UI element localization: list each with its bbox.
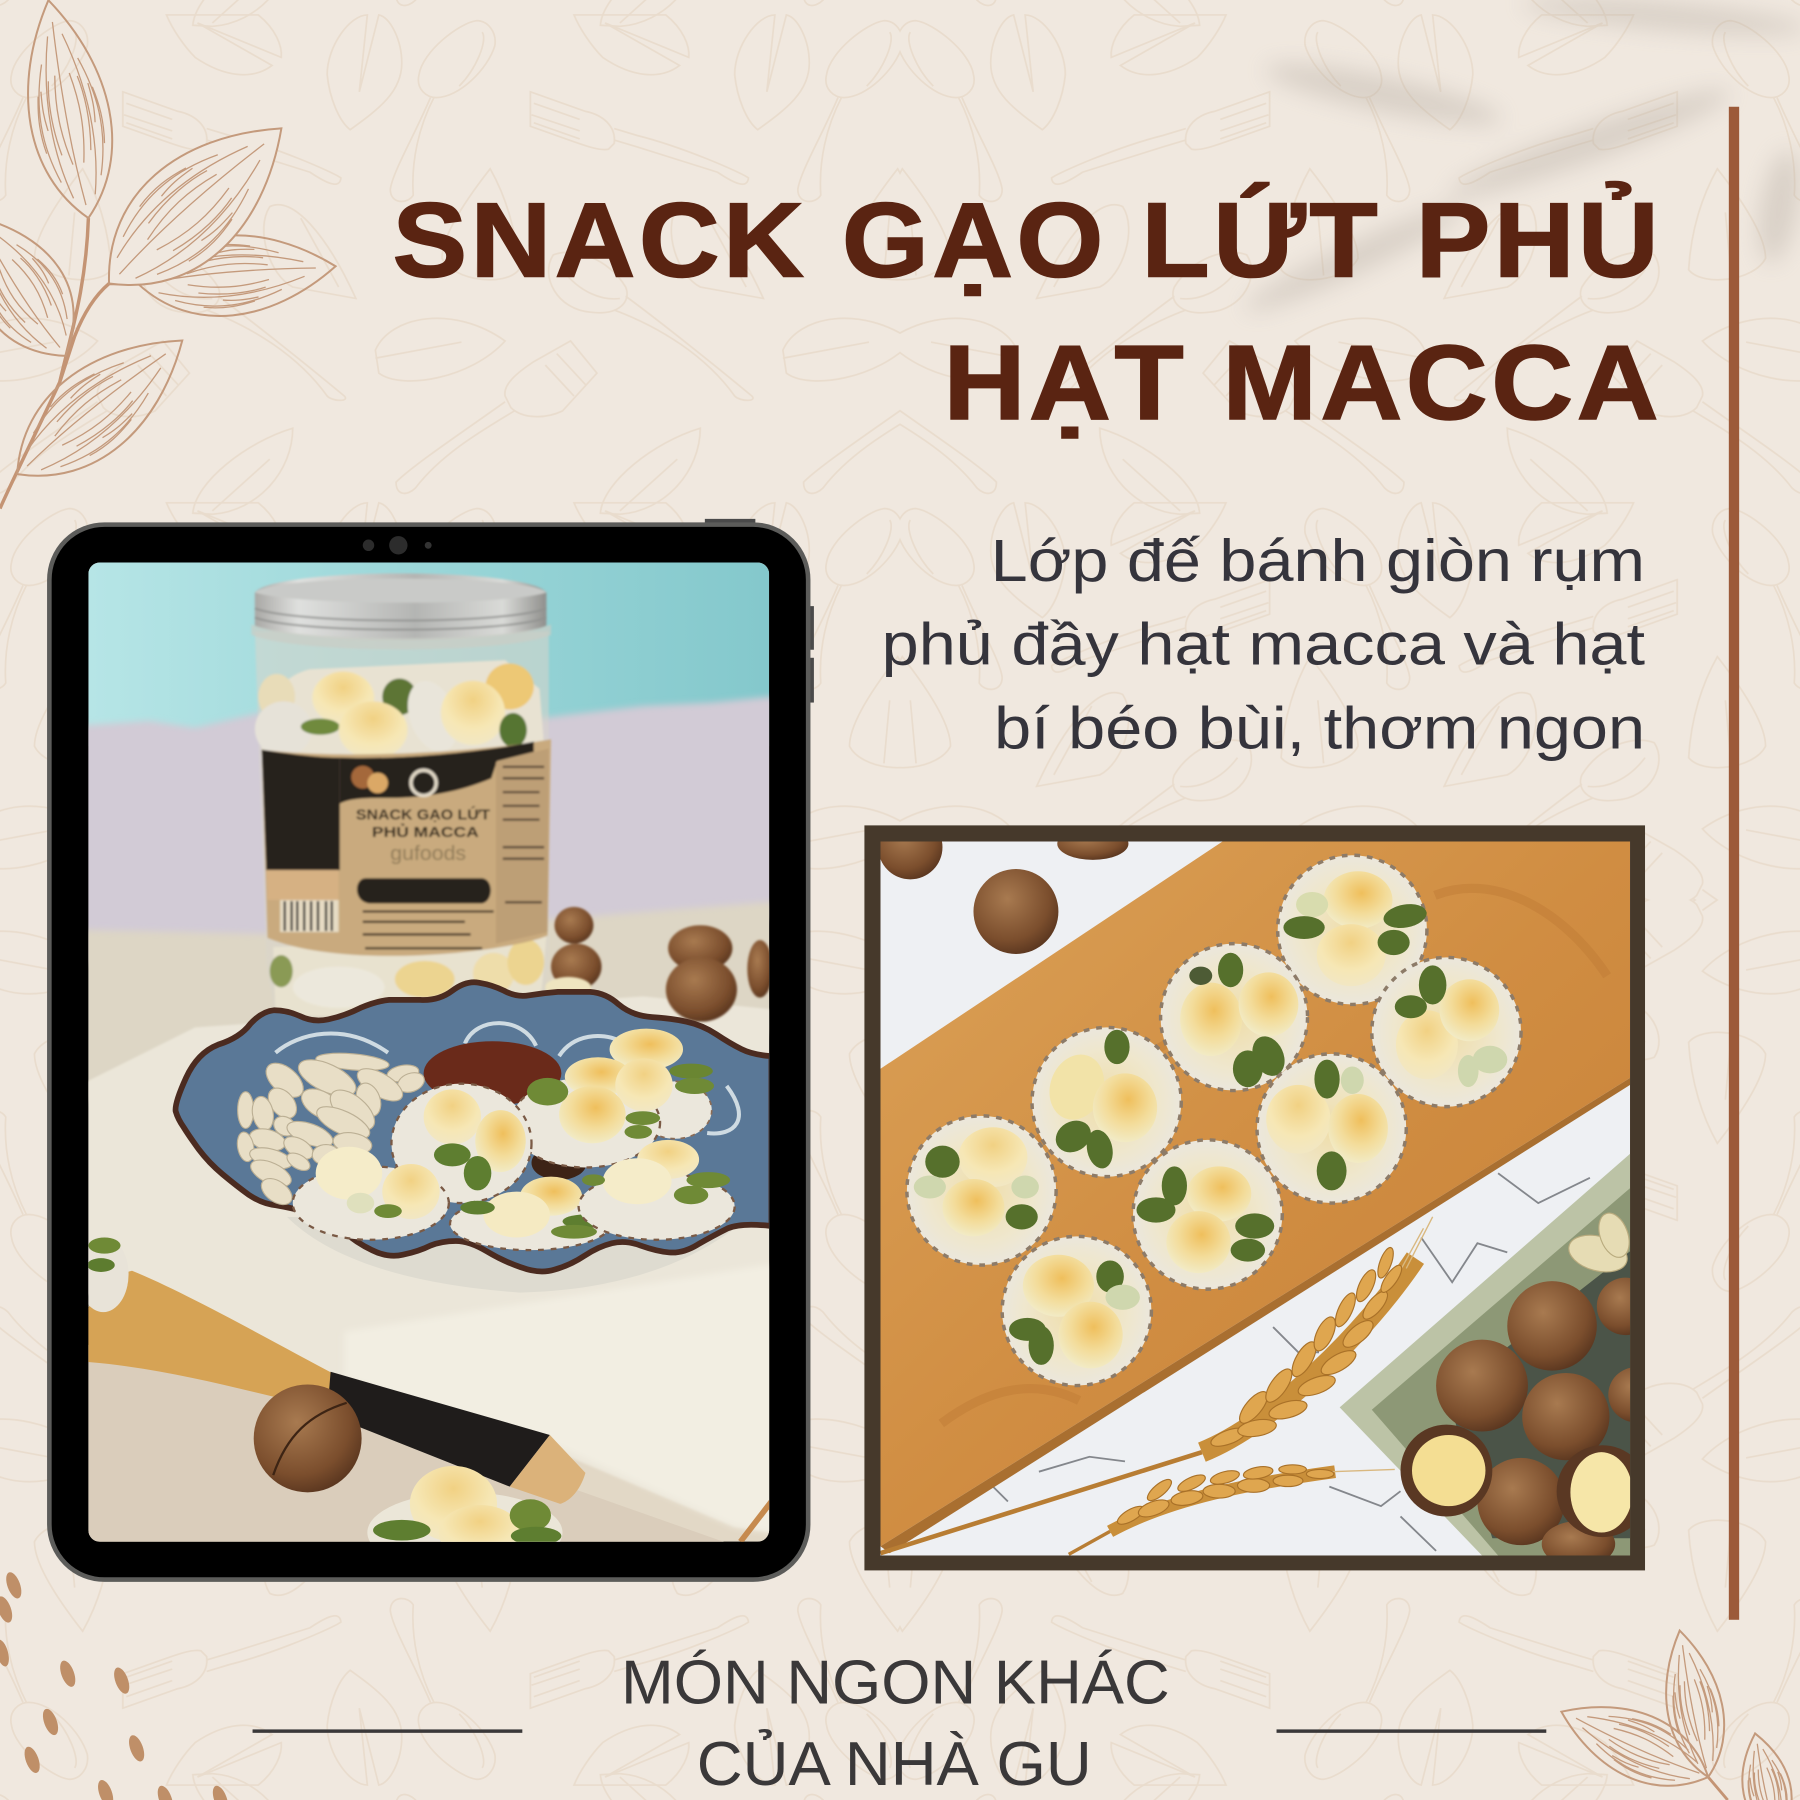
cake 3 bbox=[1372, 957, 1521, 1107]
wooden spoon bbox=[88, 1270, 330, 1397]
cake front right bbox=[579, 1140, 735, 1240]
title: SNACK GẠO LỨT PHỦ bbox=[393, 182, 1662, 300]
jar contents top bbox=[255, 660, 544, 759]
description text: bí béo bùi, thơm ngon bbox=[994, 694, 1645, 761]
cake 7 bbox=[1133, 1140, 1282, 1289]
wheat stalks bbox=[880, 1217, 1433, 1554]
bottom cake bbox=[368, 1466, 562, 1542]
jar neck ring bbox=[251, 624, 551, 649]
background nuts bbox=[551, 907, 773, 1022]
cake 4 bbox=[1032, 1027, 1181, 1177]
heading side lines bbox=[253, 1729, 1546, 1733]
tablet photo: jar and plate of snacks bbox=[78, 562, 781, 1573]
jar: SNACK GẠO LỨT bbox=[356, 806, 490, 824]
lower table bbox=[80, 1343, 746, 1550]
jar label bbox=[262, 739, 551, 956]
bottom heading bbox=[621, 1649, 1170, 1799]
pale seeds on tray bbox=[1565, 1209, 1635, 1278]
decorative branch bottom right bbox=[1548, 1625, 1800, 1800]
whole macadamias on marble bbox=[880, 842, 1128, 954]
plate swirls bbox=[276, 1022, 739, 1133]
cake 6 bbox=[907, 1116, 1056, 1265]
cutting board bbox=[880, 841, 1630, 1546]
cake front middle bbox=[450, 1177, 611, 1250]
framed photo: rice cakes on a cutting board bbox=[864, 815, 1663, 1570]
cake front left bbox=[293, 1147, 449, 1240]
rice cakes bbox=[907, 855, 1521, 1386]
macadamia nuts on tray bbox=[1401, 1278, 1663, 1567]
tablet mockup bbox=[49, 519, 814, 1580]
jar: gufoods bbox=[390, 842, 466, 865]
lavender wall bbox=[80, 696, 781, 964]
rice cakes on plate bbox=[293, 1029, 735, 1250]
dark nut under cakes bbox=[532, 1155, 586, 1180]
marble bbox=[880, 841, 1630, 1555]
decorative branch top left bbox=[0, 0, 339, 509]
small cake left edge bbox=[88, 1238, 129, 1312]
tablet cameras bbox=[363, 536, 432, 554]
plate underside bbox=[287, 1217, 735, 1293]
brown rice pile bbox=[424, 1041, 561, 1105]
cake 8 bbox=[1002, 1236, 1151, 1386]
cake 2 bbox=[1161, 944, 1308, 1091]
jar lid bbox=[255, 573, 546, 640]
tablet body bbox=[49, 525, 808, 1580]
green tray bbox=[1340, 1154, 1630, 1555]
decorative seeds bottom left bbox=[0, 1570, 231, 1800]
macadamia nut bbox=[254, 1384, 362, 1492]
plate bbox=[176, 982, 771, 1271]
description text: Lớp đế bánh giòn rụm bbox=[991, 527, 1645, 594]
leaf shadow top right bbox=[1239, 0, 1800, 323]
jar contents bottom bbox=[270, 936, 591, 1016]
cake 1 bbox=[1278, 855, 1429, 1004]
cake 5 bbox=[1257, 1054, 1406, 1203]
pumpkin seeds pile bbox=[235, 1051, 427, 1210]
description text: phủ đầy hạt macca và hạt bbox=[882, 611, 1645, 678]
bottom heading: CỦA NHÀ GU bbox=[697, 1730, 1092, 1799]
jar bbox=[251, 573, 591, 1016]
teal wall bbox=[88, 562, 769, 746]
spoon black wrap bbox=[327, 1372, 550, 1487]
spoon end bbox=[510, 1435, 585, 1504]
cake center bbox=[391, 1084, 532, 1203]
title bbox=[393, 182, 1662, 442]
description text bbox=[882, 527, 1645, 761]
sand table bbox=[80, 901, 781, 1102]
title: HẠT MACCA bbox=[944, 324, 1662, 442]
cake upper right bbox=[511, 1029, 714, 1167]
vertical accent bar bbox=[1729, 107, 1739, 1620]
jar: PHỦ MACCA bbox=[372, 823, 479, 841]
tablet buttons bbox=[705, 519, 814, 703]
photo frame bbox=[864, 825, 1645, 1570]
bottom heading: MÓN NGON KHÁC bbox=[621, 1649, 1170, 1718]
cream cloth bbox=[80, 996, 781, 1534]
